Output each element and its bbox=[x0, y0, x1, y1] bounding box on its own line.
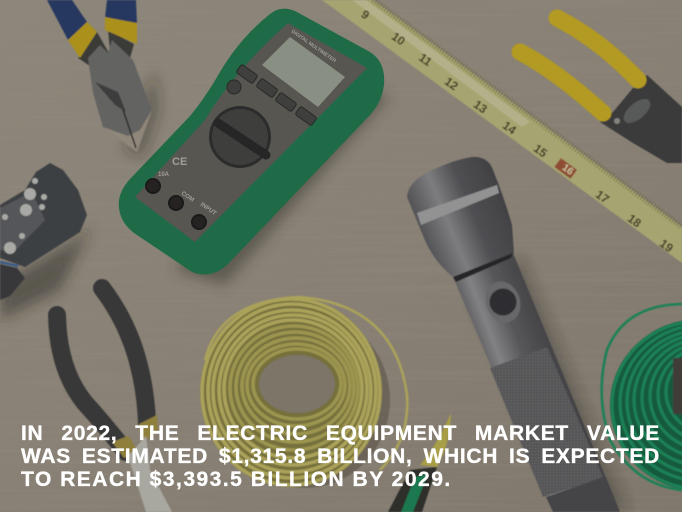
flashlight knurled grip bbox=[490, 347, 603, 497]
flashlight button bbox=[480, 276, 526, 328]
icon: measuring tape: 17 bbox=[593, 187, 612, 207]
meter screen bbox=[262, 37, 345, 107]
icon: yellow wire strippers bbox=[520, 18, 682, 163]
icon: green wire coil bbox=[602, 304, 682, 491]
meter labels: CE bbox=[172, 156, 187, 168]
icon: lineman pliers bbox=[47, 0, 158, 157]
icon: measuring tape: 9 bbox=[359, 7, 372, 23]
meter labels: DIGITAL MULTIMETER bbox=[290, 29, 337, 64]
meter labels bbox=[158, 29, 337, 217]
icon: measuring tape: 10 bbox=[389, 29, 408, 49]
icon: long nose pliers bbox=[57, 288, 172, 512]
caption: market value statement: TO REACH $3,393.5 BILLION BY 2029. bbox=[21, 468, 452, 491]
caption: market value statement: IN 2022, THE ELECTRIC EQUIPMENT MARKET VALUE bbox=[21, 422, 660, 445]
icon: screwdriver with green grip bbox=[388, 413, 451, 512]
icon: measuring tape: 19 bbox=[657, 236, 676, 256]
icon: measuring tape bbox=[322, 0, 682, 263]
icon: measuring tape: 13 bbox=[471, 97, 490, 117]
meter body bbox=[119, 9, 384, 275]
caption: market value statement bbox=[20, 422, 660, 491]
icon: measuring tape: 16 bbox=[560, 162, 576, 178]
icon: digital multimeter bbox=[119, 9, 390, 285]
icon: measuring tape: 15 bbox=[531, 141, 550, 161]
icon: measuring tape: 12 bbox=[442, 74, 461, 94]
flashlight barrel bbox=[453, 253, 620, 512]
meter face bbox=[135, 23, 367, 242]
meter dial bbox=[209, 106, 271, 168]
icon: measuring tape: 14 bbox=[500, 118, 519, 138]
caption: market value statement: WAS ESTIMATED $1,315.8 BILLION, WHICH IS EXPECTED bbox=[21, 445, 660, 468]
icon: automatic wire stripper bbox=[0, 163, 92, 320]
meter labels: 10A bbox=[158, 172, 170, 178]
flashlight head bbox=[407, 157, 514, 277]
icon: measuring tape: 11 bbox=[416, 50, 435, 69]
meter buttons bbox=[227, 64, 317, 126]
icon: yellow wire coil bbox=[200, 297, 407, 488]
meter jacks bbox=[146, 179, 206, 229]
icon: flashlight bbox=[407, 157, 630, 512]
icon: measuring tape: 18 bbox=[625, 211, 644, 231]
meter labels: COM bbox=[180, 191, 195, 204]
meter labels: INPUT bbox=[199, 202, 217, 217]
